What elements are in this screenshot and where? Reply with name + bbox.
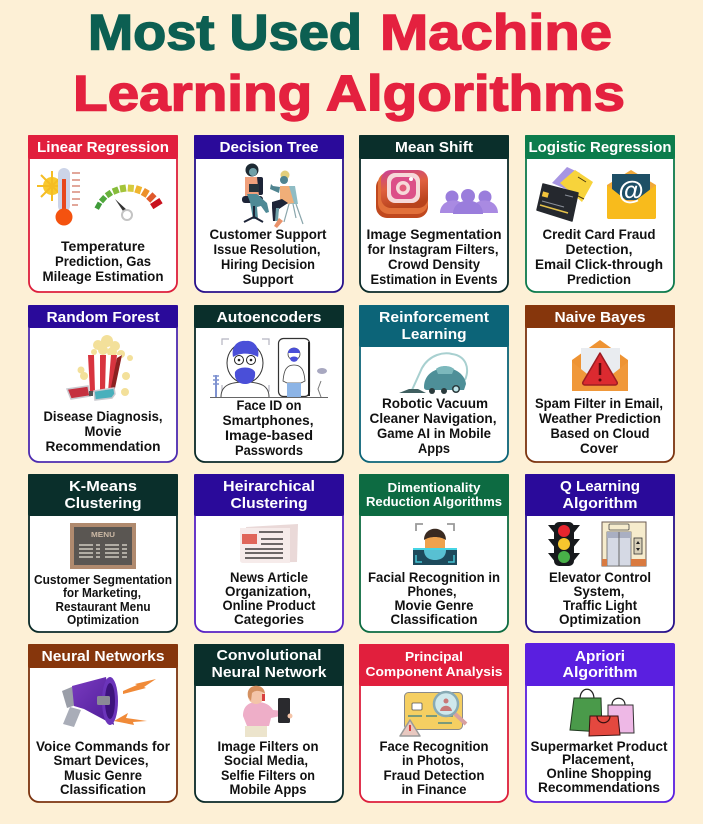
description: Mobile Apps (230, 782, 306, 797)
panel: Decision Tree (194, 135, 344, 292)
panel: Neural Networks (28, 644, 178, 802)
header: Reinforcement Learning: Reinforcement (379, 309, 489, 326)
header: Linear Regression (28, 135, 178, 159)
header: Q Learning Algorithm: Algorithm (562, 495, 638, 512)
description: Categories (234, 612, 304, 627)
header: Autoencoders: Autoencoders (216, 309, 322, 326)
header: Apriori Algorithm: Algorithm (562, 664, 638, 681)
description: Voice Commands for (36, 739, 171, 754)
icon: crowd (440, 189, 498, 214)
description: Classification (60, 782, 146, 797)
header: Logistic Regression (525, 135, 675, 159)
header: Logistic Regression: Logistic Regression (528, 139, 672, 156)
description: Online Product (222, 598, 316, 613)
description: Cover (580, 441, 619, 456)
title: Learning Algorithms (73, 66, 625, 122)
description: Customer Segmentation (34, 573, 172, 587)
icon: popcorn and 3D glasses (67, 335, 133, 400)
header: K-Means Clustering: Clustering (64, 495, 142, 512)
icon: facial recognition scan (413, 524, 457, 565)
header: Reinforcement Learning (359, 305, 509, 347)
description: Online Shopping (546, 766, 652, 781)
description: Image Filters on (218, 739, 318, 754)
header: Principal Component Analysis (359, 644, 509, 686)
icon: card with magnifier and warning (400, 692, 466, 736)
header: Dimentionality Reduction Algorithms (359, 474, 509, 516)
description: Customer Support (210, 227, 327, 242)
description: Game AI in Mobile (377, 426, 491, 441)
icon: traffic light (548, 522, 580, 566)
description: for Marketing, (63, 586, 141, 600)
header: Autoencoders (194, 305, 344, 328)
description: Mileage Estimation (42, 269, 164, 284)
description: Facial Recognition in (368, 570, 500, 585)
description: Apps (418, 441, 450, 456)
panel: Heirarchical Clustering (194, 474, 344, 632)
description (549, 570, 651, 627)
description: Face Recognition (380, 739, 488, 754)
header: Convolutional Neural Network: Convolutional (216, 647, 322, 664)
description: System, (574, 584, 624, 599)
header: Dimentionality Reduction Algorithms: Reduction Algorithms (366, 494, 502, 509)
description: Disease Diagnosis, (44, 409, 162, 424)
icon: woman with phone (243, 686, 292, 737)
description: Email Click-through (535, 257, 663, 272)
description: Traffic Light (563, 598, 637, 613)
panel: Q Learning Algorithm (525, 474, 675, 632)
icon: megaphone (62, 677, 156, 727)
description: Restaurant Menu (56, 600, 150, 614)
header: Apriori Algorithm: Apriori (575, 648, 625, 665)
panel: Autoencoders (194, 305, 344, 462)
description: Music Genre (64, 768, 142, 783)
description: Crowd Density (388, 257, 480, 272)
header: Random Forest: Random Forest (46, 309, 160, 326)
description: Placement, (562, 752, 634, 767)
description: for Instagram Filters, (368, 242, 498, 257)
icon: credit cards (537, 167, 593, 221)
description (36, 739, 171, 797)
description: Credit Card Fraud (542, 227, 656, 242)
icon: email envelope (607, 170, 656, 219)
description: Temperature (61, 239, 146, 254)
panel: Dimentionality Reduction Algorithms (359, 474, 509, 632)
header: Q Learning Algorithm: Q Learning (560, 478, 640, 495)
description: News Article (230, 570, 308, 585)
description: Weather Prediction (539, 411, 661, 426)
icon: Instagram logo (376, 170, 428, 218)
description: Estimation in Events (370, 272, 498, 287)
icon: shopping bags (570, 689, 634, 736)
header: Q Learning Algorithm (525, 474, 675, 516)
description: Robotic Vacuum (382, 396, 488, 411)
description (535, 227, 663, 287)
header: Mean Shift (359, 135, 509, 159)
description (210, 227, 327, 287)
description: Prediction, Gas (55, 254, 151, 269)
icon: spam email warning (572, 340, 628, 391)
header: Neural Networks: Neural Networks (42, 648, 164, 665)
header: Linear Regression: Linear Regression (37, 139, 169, 156)
description: Support (242, 272, 294, 287)
header: Apriori Algorithm (525, 643, 675, 686)
icon: newspaper (240, 524, 298, 563)
description: Passwords (235, 443, 303, 458)
header: Principal Component Analysis: Component Analysis (366, 664, 502, 679)
description: Image-based (225, 428, 313, 443)
description: Recommendations (538, 780, 660, 795)
icon: robotic vacuum cleaner (399, 353, 467, 394)
panel: Convolutional Neural Network (194, 644, 344, 802)
description (380, 739, 488, 797)
icon: restaurant menu board (70, 523, 136, 569)
icon: sun and thermometer (37, 168, 80, 226)
panel: Apriori Algorithm (525, 643, 675, 802)
header: Principal Component Analysis: Principal (405, 649, 463, 664)
description: Issue Resolution, (214, 242, 320, 257)
description: Classification (390, 612, 478, 627)
header: K-Means Clustering: K-Means (69, 478, 137, 495)
icon: email envelope: @ (618, 175, 644, 205)
description: Movie (84, 424, 122, 439)
description: Elevator Control (549, 570, 651, 585)
header: Neural Networks (28, 644, 178, 668)
description (42, 239, 164, 284)
description: Movie Genre (394, 598, 474, 613)
title (73, 4, 625, 122)
description (34, 573, 172, 627)
description: Selfie Filters on (221, 768, 315, 783)
header: Mean Shift: Mean Shift (395, 139, 473, 156)
description: Based on Cloud (550, 426, 650, 441)
description: Optimization (559, 612, 641, 627)
description: Recommendation (46, 439, 160, 454)
description: in Finance (402, 782, 467, 797)
description: Detection, (566, 242, 632, 257)
icon: restaurant menu board: MENU (91, 532, 115, 539)
description (222, 398, 314, 458)
header: Heirarchical Clustering: Heirarchical (223, 478, 315, 495)
icon: face recognition illustration (210, 338, 328, 398)
description: Phones, (408, 584, 456, 599)
panel: Reinforcement Learning (359, 305, 509, 462)
panel: Naive Bayes (525, 305, 675, 462)
description: Fraud Detection (384, 768, 484, 783)
description (366, 227, 502, 287)
description: Cleaner Navigation, (370, 411, 496, 426)
description: Image Segmentation (366, 227, 502, 242)
description: Social Media, (224, 753, 308, 768)
header: Heirarchical Clustering (194, 474, 344, 516)
header: Heirarchical Clustering: Clustering (230, 495, 308, 512)
icon: two people talking (242, 164, 303, 228)
header: Decision Tree: Decision Tree (220, 139, 318, 156)
header: Dimentionality Reduction Algorithms: Dimentionality (388, 480, 481, 495)
header: Naive Bayes (525, 305, 675, 328)
description (222, 570, 316, 627)
description (370, 396, 496, 456)
panel: K-Means Clustering (28, 474, 178, 632)
header: Decision Tree (194, 135, 344, 159)
panel: Linear Regression (28, 135, 178, 292)
icon: elevator (602, 522, 646, 566)
description (44, 409, 162, 454)
header: K-Means Clustering (28, 474, 178, 516)
description (218, 739, 318, 797)
description: in Photos, (402, 753, 464, 768)
icon: fuel gauge (97, 188, 158, 220)
title: Machine (380, 4, 612, 60)
description: Organization, (225, 584, 311, 599)
header: Reinforcement Learning: Learning (402, 326, 466, 343)
header: Naive Bayes: Naive Bayes (554, 309, 646, 326)
header: Random Forest (28, 305, 178, 328)
description: Prediction (567, 272, 631, 287)
panel: Random Forest (28, 305, 178, 462)
description: Smart Devices, (54, 753, 148, 768)
description: Smartphones, (222, 413, 314, 428)
description: Hiring Decision (221, 257, 315, 272)
panel: Mean Shift (359, 135, 509, 292)
header: Convolutional Neural Network: Neural Network (212, 664, 327, 681)
panel: Logistic Regression (525, 135, 675, 292)
description: Optimization (67, 613, 139, 627)
description: Supermarket Product (530, 739, 668, 754)
header: Convolutional Neural Network (194, 644, 344, 686)
title: Most Used (88, 4, 362, 60)
description (530, 739, 668, 795)
description (535, 396, 663, 456)
description: Spam Filter in Email, (535, 396, 663, 411)
description (368, 570, 500, 627)
panel: Principal Component Analysis (359, 644, 509, 802)
description: Face ID on (236, 398, 302, 413)
